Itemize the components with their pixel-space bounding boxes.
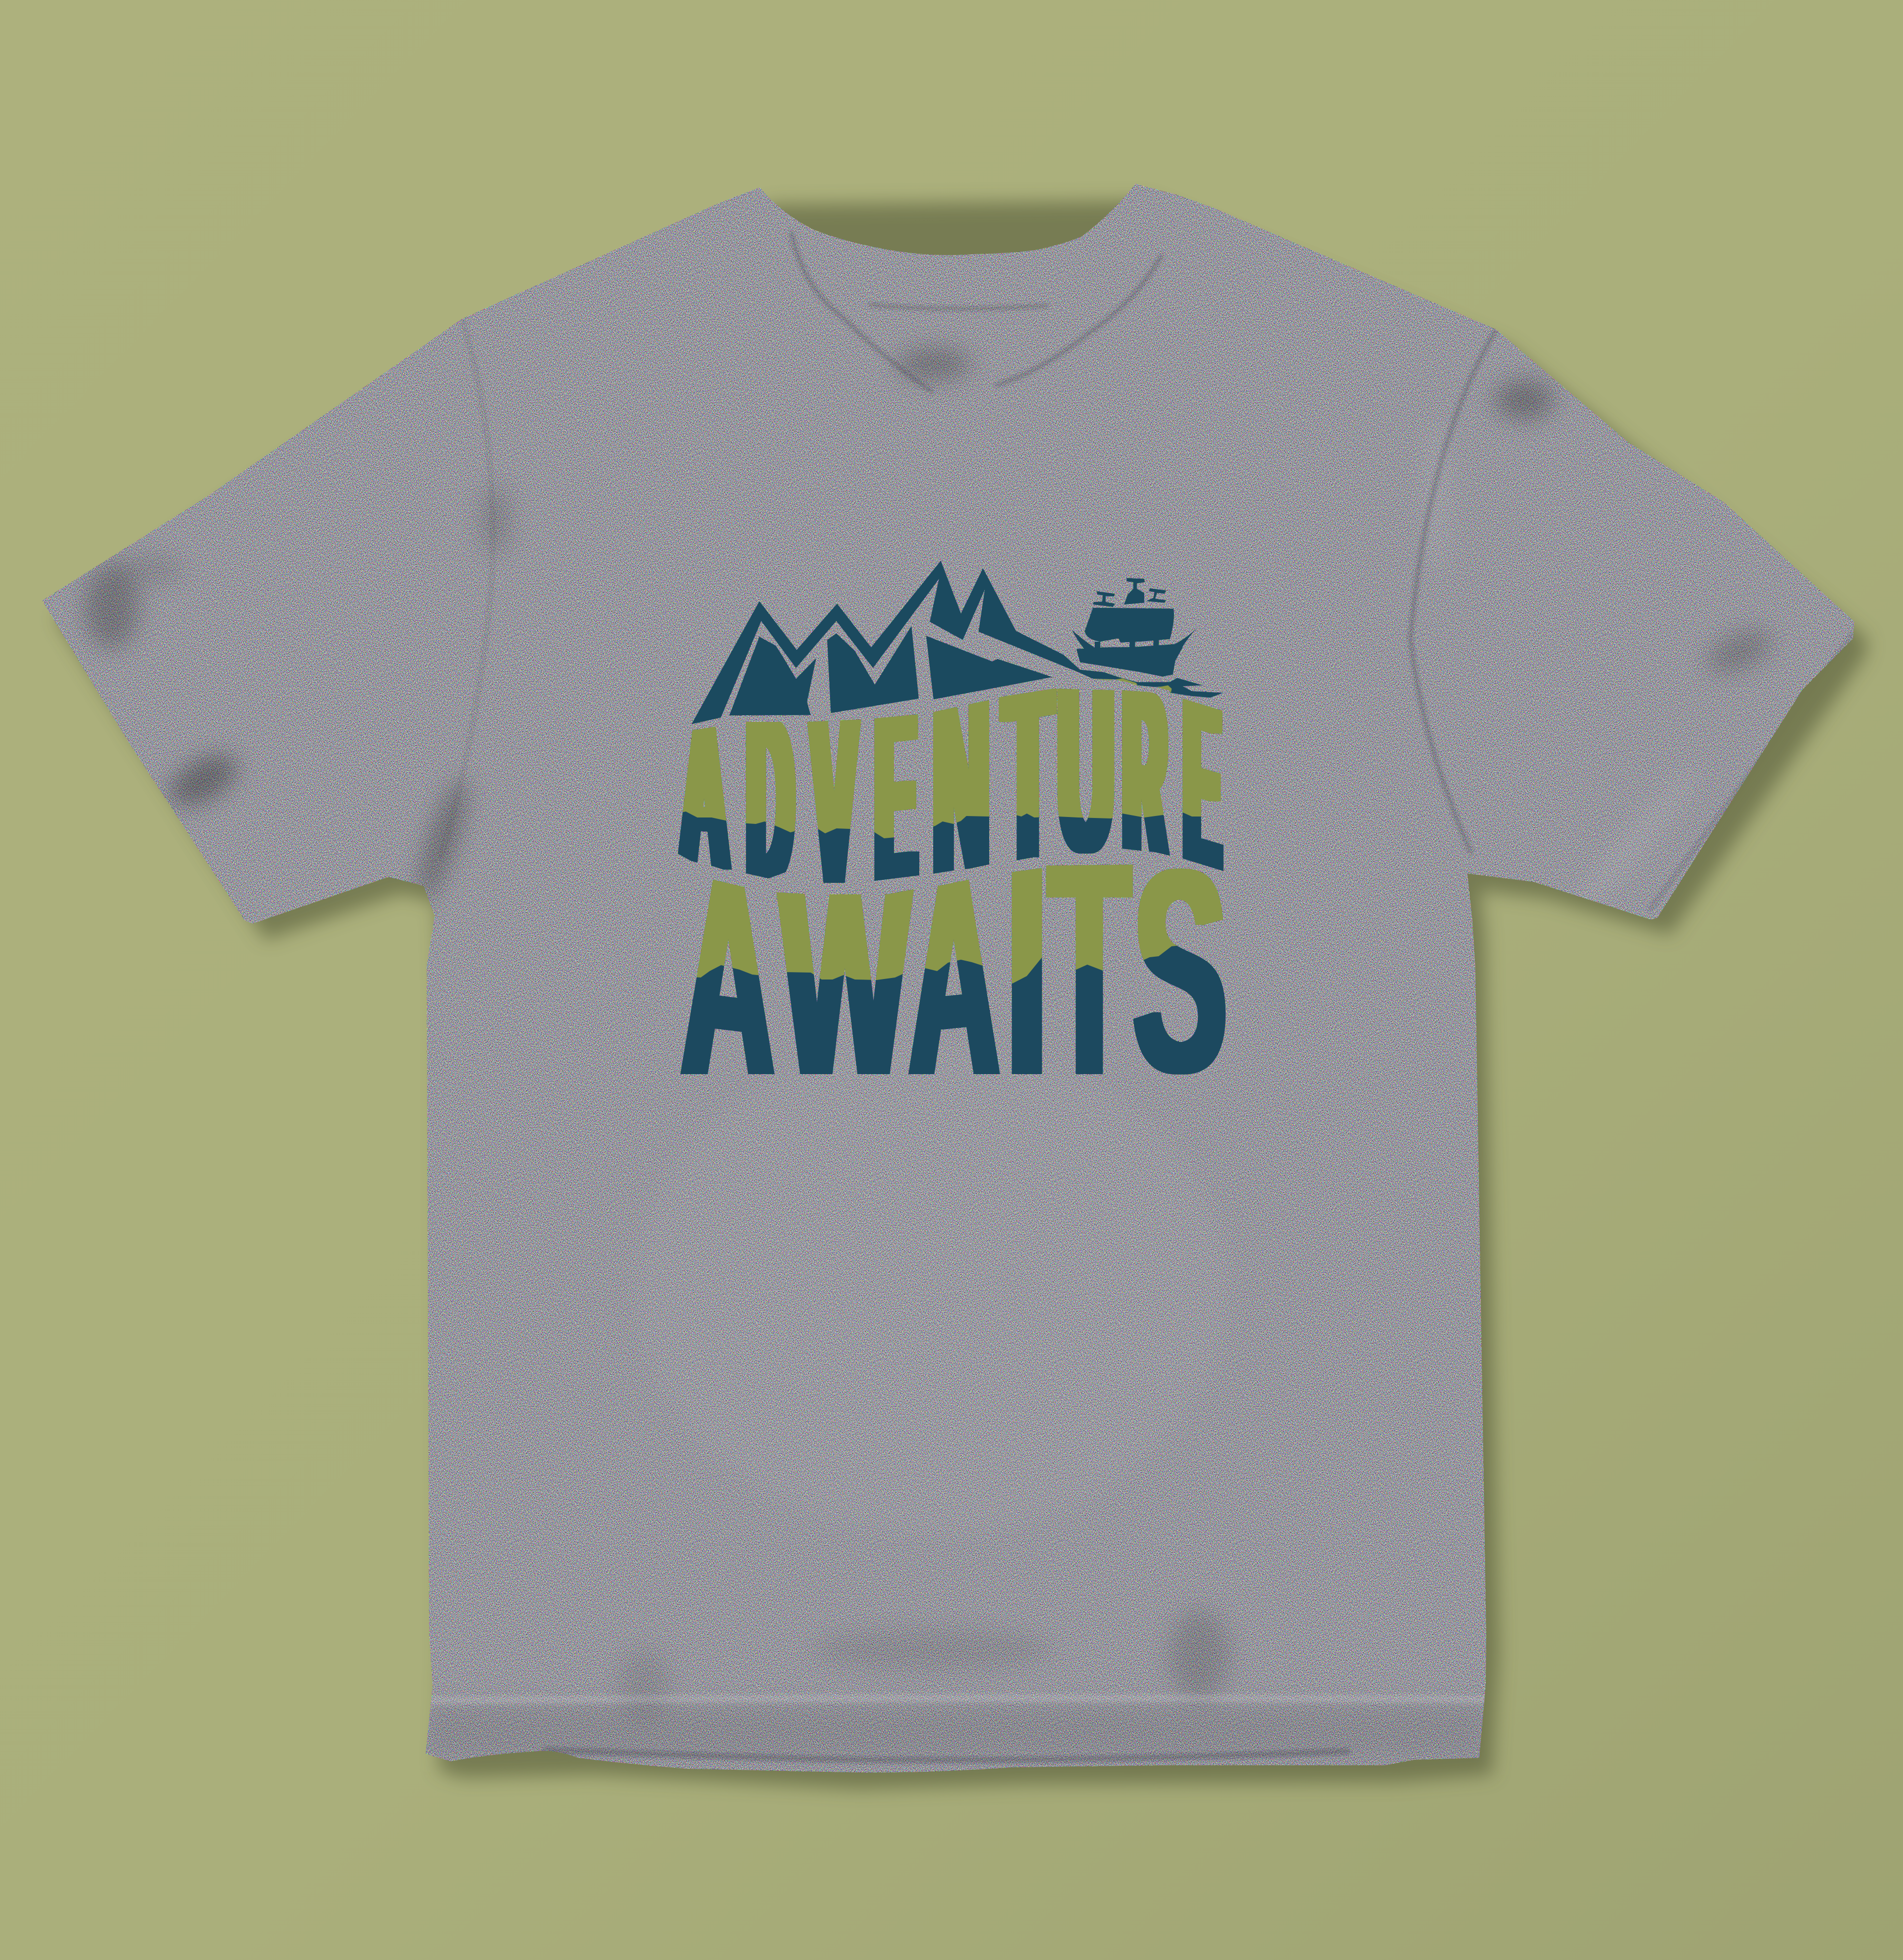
graphic print bbox=[680, 561, 1227, 1150]
upper olive lettering: A bbox=[681, 813, 776, 1150]
upper olive lettering: R bbox=[1123, 639, 1166, 911]
lower navy lettering: T bbox=[1004, 633, 1052, 921]
lower navy lettering: I bbox=[1006, 800, 1049, 1146]
lower navy lettering: R bbox=[1123, 639, 1166, 911]
collar, armhole and hem seams bbox=[431, 233, 1853, 1760]
upper olive lettering: V bbox=[812, 665, 857, 940]
lower navy lettering: A bbox=[908, 813, 1000, 1147]
lower navy lettering: E bbox=[1184, 646, 1220, 926]
lower navy lettering: A bbox=[681, 813, 776, 1150]
lower navy lettering bbox=[681, 796, 1227, 1150]
upper olive lettering: U bbox=[1058, 631, 1114, 905]
fabric folds and shading bbox=[84, 348, 1778, 1759]
lower navy lettering: N bbox=[934, 646, 989, 931]
lower navy lettering bbox=[680, 631, 1220, 940]
upper olive lettering: N bbox=[934, 646, 989, 931]
icon: olive shoreline patches bbox=[1094, 678, 1172, 693]
upper olive lettering: W bbox=[780, 831, 911, 1138]
upper olive lettering: A bbox=[908, 813, 1000, 1147]
upper olive lettering: I bbox=[1006, 800, 1049, 1146]
lower navy lettering: E bbox=[876, 660, 916, 937]
upper olive lettering: T bbox=[1049, 796, 1130, 1146]
shirt drop shadow bbox=[55, 201, 1867, 1789]
icon: left mountain face bbox=[729, 637, 816, 715]
lower navy lettering: D bbox=[747, 669, 793, 933]
lower navy lettering: V bbox=[812, 665, 857, 940]
upper olive lettering bbox=[680, 631, 1220, 940]
upper olive lettering: E bbox=[876, 660, 916, 937]
icon: sailing ship bbox=[1072, 578, 1198, 677]
heading word: ADVENTURE bbox=[680, 631, 1220, 940]
lower navy lettering: T bbox=[1049, 796, 1130, 1146]
upper olive lettering: S bbox=[1133, 811, 1227, 1135]
lower navy lettering: W bbox=[780, 831, 911, 1138]
upper olive lettering: A bbox=[680, 677, 728, 915]
mountain range with ship bbox=[691, 561, 1223, 724]
icon: mountain outline and wave ridge bbox=[691, 561, 1223, 724]
icon: right mountain face bbox=[926, 636, 1053, 700]
upper olive lettering: T bbox=[1004, 633, 1052, 921]
lower navy lettering: U bbox=[1058, 631, 1114, 905]
lower navy lettering: A bbox=[680, 677, 728, 915]
upper olive lettering: D bbox=[747, 669, 793, 933]
icon: middle mountain face bbox=[827, 626, 919, 713]
heading word: AWAITS bbox=[681, 796, 1227, 1150]
upper olive lettering bbox=[681, 796, 1227, 1150]
upper olive lettering: E bbox=[1184, 646, 1220, 926]
lower navy lettering: S bbox=[1133, 811, 1227, 1135]
